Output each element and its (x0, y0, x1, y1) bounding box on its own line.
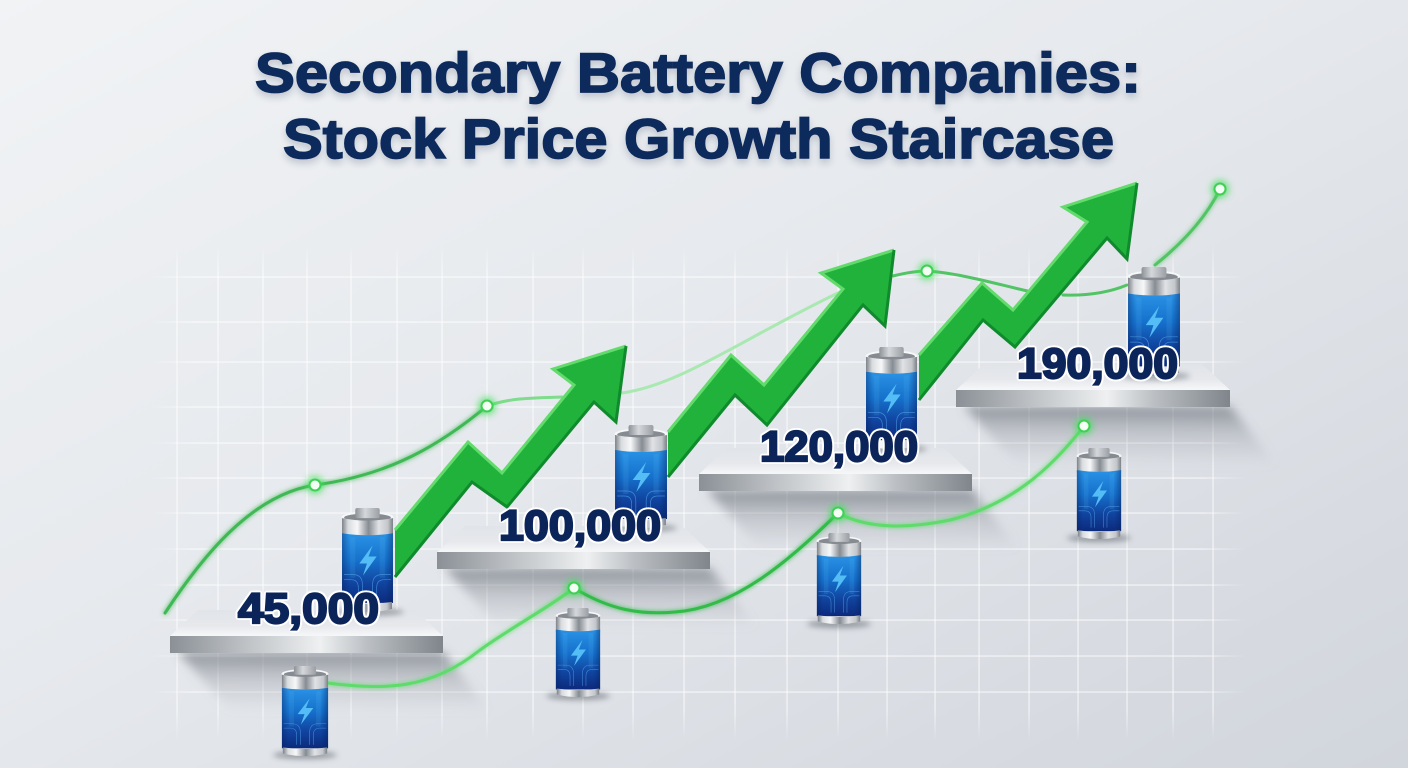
trend line nodes (306, 180, 1229, 597)
battery on shelf 2 (609, 425, 677, 532)
arrow: third rise (919, 183, 1137, 400)
shelf step 2 (437, 526, 710, 569)
value: 120,000: 120,000 (760, 423, 918, 471)
battery on shelf 3 (859, 347, 927, 453)
shelf step 3 (699, 448, 972, 491)
value: 190,000: 190,000 (1017, 340, 1178, 388)
value: 120,000: 120,000 (760, 423, 918, 471)
battery on shelf 1 (336, 508, 404, 616)
lower trend line (328, 426, 1084, 687)
value: 100,000: 100,000 (499, 502, 661, 550)
shelf step 1 (170, 610, 443, 653)
title: Secondary Battery Companies: (255, 41, 1141, 104)
battery below shelf 3 (807, 533, 871, 628)
shelf step 4 (956, 364, 1230, 407)
battery on shelf 4 (1122, 267, 1190, 380)
shelf shadows (178, 406, 1277, 712)
battery below shelf 1 (273, 666, 337, 759)
arrow: second rise (668, 250, 894, 477)
arrow: first rise (395, 346, 626, 577)
title (255, 41, 1141, 170)
title: Stock Price Growth Staircase (283, 107, 1114, 170)
value: 45,000: 45,000 (238, 585, 379, 633)
upper trend line (165, 189, 1220, 613)
grid (150, 245, 1246, 740)
battery below shelf 4 (1067, 448, 1131, 542)
value: 45,000: 45,000 (238, 585, 379, 633)
value: 100,000: 100,000 (499, 502, 661, 550)
battery below shelf 2 (546, 608, 610, 700)
value: 190,000: 190,000 (1017, 340, 1178, 388)
